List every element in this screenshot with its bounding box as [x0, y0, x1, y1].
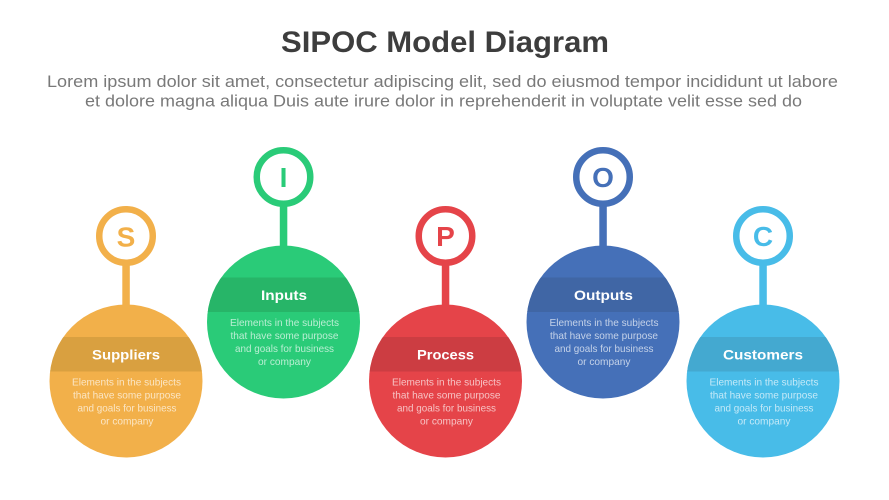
- text block: Inputs: or company: [258, 356, 312, 368]
- title: SIPOC Model Diagram: [281, 26, 609, 59]
- text block: Process: [392, 376, 501, 428]
- icon: letter C badge: [736, 209, 790, 263]
- icon: letter S badge: S: [117, 222, 135, 252]
- heading: Customers: Customers: [723, 346, 803, 362]
- text block: Process: that have some purpose: [392, 390, 501, 402]
- text block: Outputs: [550, 317, 658, 368]
- panel: Process: [360, 209, 530, 458]
- text block: Customers: Elements in the subjects: [710, 376, 818, 388]
- text block: Suppliers: [72, 376, 181, 428]
- text block: Customers: or company: [738, 416, 791, 428]
- text block: Outputs: or company: [578, 356, 631, 368]
- text block: Process: and goals for business: [397, 402, 496, 414]
- icon: letter C badge: C: [753, 221, 773, 252]
- subtitle: [47, 73, 838, 110]
- text block: Process: Elements in the subjects: [392, 376, 501, 388]
- icon: letter O badge: O: [592, 162, 614, 193]
- panel: Suppliers: [40, 209, 210, 458]
- subtitle: et dolore magna aliqua Duis aute irure dolor in reprehenderit in voluptate velit esse sed do: [85, 92, 802, 110]
- heading: Inputs: Inputs: [261, 287, 307, 303]
- text block: Customers: that have some purpose: [710, 390, 818, 402]
- icon: letter O badge: [576, 150, 630, 204]
- heading: Suppliers: Suppliers: [92, 346, 160, 362]
- text block: Inputs: that have some purpose: [230, 330, 339, 342]
- icon: letter I badge: I: [280, 162, 287, 193]
- icon: letter S badge: [99, 209, 153, 263]
- text block: Customers: [710, 376, 818, 428]
- panel: Inputs: [200, 150, 370, 398]
- icon: letter I badge: [257, 150, 310, 204]
- text block: Outputs: Elements in the subjects: [550, 317, 658, 329]
- text block: Process: or company: [420, 416, 474, 428]
- heading: Process: Process: [417, 346, 474, 362]
- text block: Suppliers: that have some purpose: [73, 390, 181, 402]
- text block: Suppliers: Elements in the subjects: [72, 376, 181, 388]
- text block: Inputs: [230, 317, 339, 368]
- icon: letter P badge: P: [436, 221, 455, 252]
- text block: Inputs: Elements in the subjects: [230, 317, 339, 329]
- text block: Outputs: and goals for business: [554, 343, 654, 355]
- panel: Customers: [680, 209, 850, 458]
- subtitle: Lorem ipsum dolor sit amet, consectetur adipiscing elit, sed do eiusmod tempor incididunt ut labore: [47, 73, 838, 91]
- text block: Suppliers: and goals for business: [78, 402, 176, 414]
- heading: Outputs: Outputs: [574, 287, 633, 303]
- icon: letter P badge: [419, 209, 472, 263]
- panel: Outputs: [520, 150, 690, 398]
- text block: Outputs: that have some purpose: [550, 330, 658, 342]
- text block: Inputs: and goals for business: [235, 343, 334, 355]
- text block: Customers: and goals for business: [714, 402, 814, 414]
- text block: Suppliers: or company: [100, 416, 154, 428]
